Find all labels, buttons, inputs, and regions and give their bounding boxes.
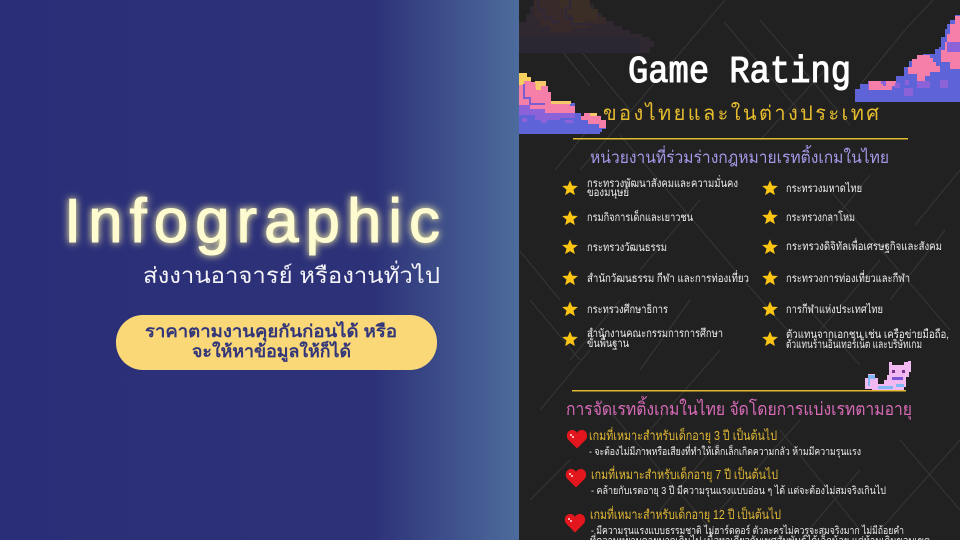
item 12 xyxy=(762,328,949,351)
heading: Infographic: Infographic xyxy=(64,187,440,256)
item 10: กระทรวงการท่องเที่ยวและกีฬา xyxy=(786,270,910,285)
item 4 xyxy=(562,270,749,285)
rating row: age 12: - มีความรุนแรงแบบธรรมชาติ ไม่ฮาร์ดคอร์ ตัวละครไม่ควรจะสมจริงมาก ไม่มีถ้อยคำ xyxy=(591,524,904,537)
icon: dim pixel cloud top left xyxy=(519,0,654,53)
icon: pink pixel cloud right xyxy=(855,15,960,102)
rating row: age 3 xyxy=(567,426,861,458)
icon: heart xyxy=(567,430,587,448)
item 2 xyxy=(562,209,693,225)
section: agencies drafting the law xyxy=(562,138,949,351)
rating row: age 3: เกมที่เหมาะสำหรับเด็กอายุ 3 ปี เป็นต้นไป xyxy=(589,426,777,444)
item 6: ขั้นพื้นฐาน xyxy=(587,335,629,350)
divider line top xyxy=(573,138,908,140)
item 9 xyxy=(762,238,942,254)
item 3 xyxy=(562,240,667,254)
subtitle: Thai and abroad: ของไทยและในต่างประเทศ xyxy=(603,102,879,125)
list: agencies column two xyxy=(762,180,949,351)
item 11 xyxy=(762,302,883,316)
item 7: กระทรวงมหาดไทย xyxy=(786,182,862,195)
rating row: age 3: - จะต้องไม่มีภาพหรือเสียงที่ทำให้เด็กเล็กเกิดความกลัว ห้ามมีความรุนแรง xyxy=(589,444,861,458)
item 6 xyxy=(562,327,723,350)
title: Game Rating: Game Rating xyxy=(628,51,851,94)
icon: heart xyxy=(566,469,586,488)
item 5: กระทรวงศึกษาธิการ xyxy=(587,303,668,316)
heading: rating by age: การจัดเรทติ้งเกมในไทย จัดโดยการแบ่งเรทตามอายุ xyxy=(566,396,912,420)
heading: Infographic: Infographic xyxy=(64,187,440,256)
item 11: การกีฬาแห่งประเทศไทย xyxy=(786,303,883,316)
callout: price pill xyxy=(116,315,437,370)
icon: pink pixel cloud left xyxy=(519,73,606,134)
icon: heart xyxy=(565,514,585,532)
panel: right poster background xyxy=(519,0,960,540)
item 8: กระทรวงกลาโหม xyxy=(786,210,855,224)
callout: price pill: ราคาตามงานคุยกันก่อนได้ หรือ xyxy=(145,321,397,342)
divider line bottom xyxy=(572,390,906,392)
item 1: กระทรวงพัฒนาสังคมและความมั่นคง xyxy=(587,175,738,190)
item 3: กระทรวงวัฒนธรรม xyxy=(587,242,667,254)
panel: left cover background xyxy=(0,0,519,540)
rating row: age 12 xyxy=(565,505,930,540)
item 10 xyxy=(762,270,910,285)
item 2: กรมกิจการเด็กและเยาวชน xyxy=(587,209,693,224)
rating row: age 7 xyxy=(566,465,886,497)
rating row: age 7: เกมที่เหมาะสำหรับเด็กอายุ 7 ปี เป็นต้นไป xyxy=(591,465,778,483)
rating row: age 12: เกมที่เหมาะสำหรับเด็กอายุ 12 ปี เป็นต้นไป xyxy=(590,505,781,523)
subtitle: ส่งงานอาจารย์ หรืองานทั่วไป xyxy=(143,260,440,288)
item 6: สำนักงานคณะกรรมการการศึกษา xyxy=(587,327,723,340)
rating row: age 7: - คล้ายกับเรตอายุ 3 ปี มีความรุนแรงแบบอ่อน ๆ ได้ แต่จะต้องไม่สมจริงเกินไป xyxy=(591,484,886,497)
callout: price pill: จะให้หาข้อมูลให้ก็ได้ xyxy=(192,339,351,363)
item 8 xyxy=(762,210,855,224)
panel: left cover content xyxy=(64,187,440,370)
section: age rating xyxy=(565,361,930,540)
list: agencies column one xyxy=(562,175,749,350)
heading: agencies: หน่วยงานที่ร่วมร่างกฎหมายเรทติ้งเกมในไทย xyxy=(590,145,889,167)
item 4: สำนักวัฒนธรรม กีฬา และการท่องเที่ยว xyxy=(587,270,749,285)
background lattice pattern xyxy=(519,0,960,540)
item 1: ของมนุษย์ xyxy=(587,185,629,199)
item 7 xyxy=(762,180,862,195)
item 5 xyxy=(562,302,668,316)
item 1 xyxy=(562,175,738,199)
icon: pixel cat xyxy=(865,361,911,390)
